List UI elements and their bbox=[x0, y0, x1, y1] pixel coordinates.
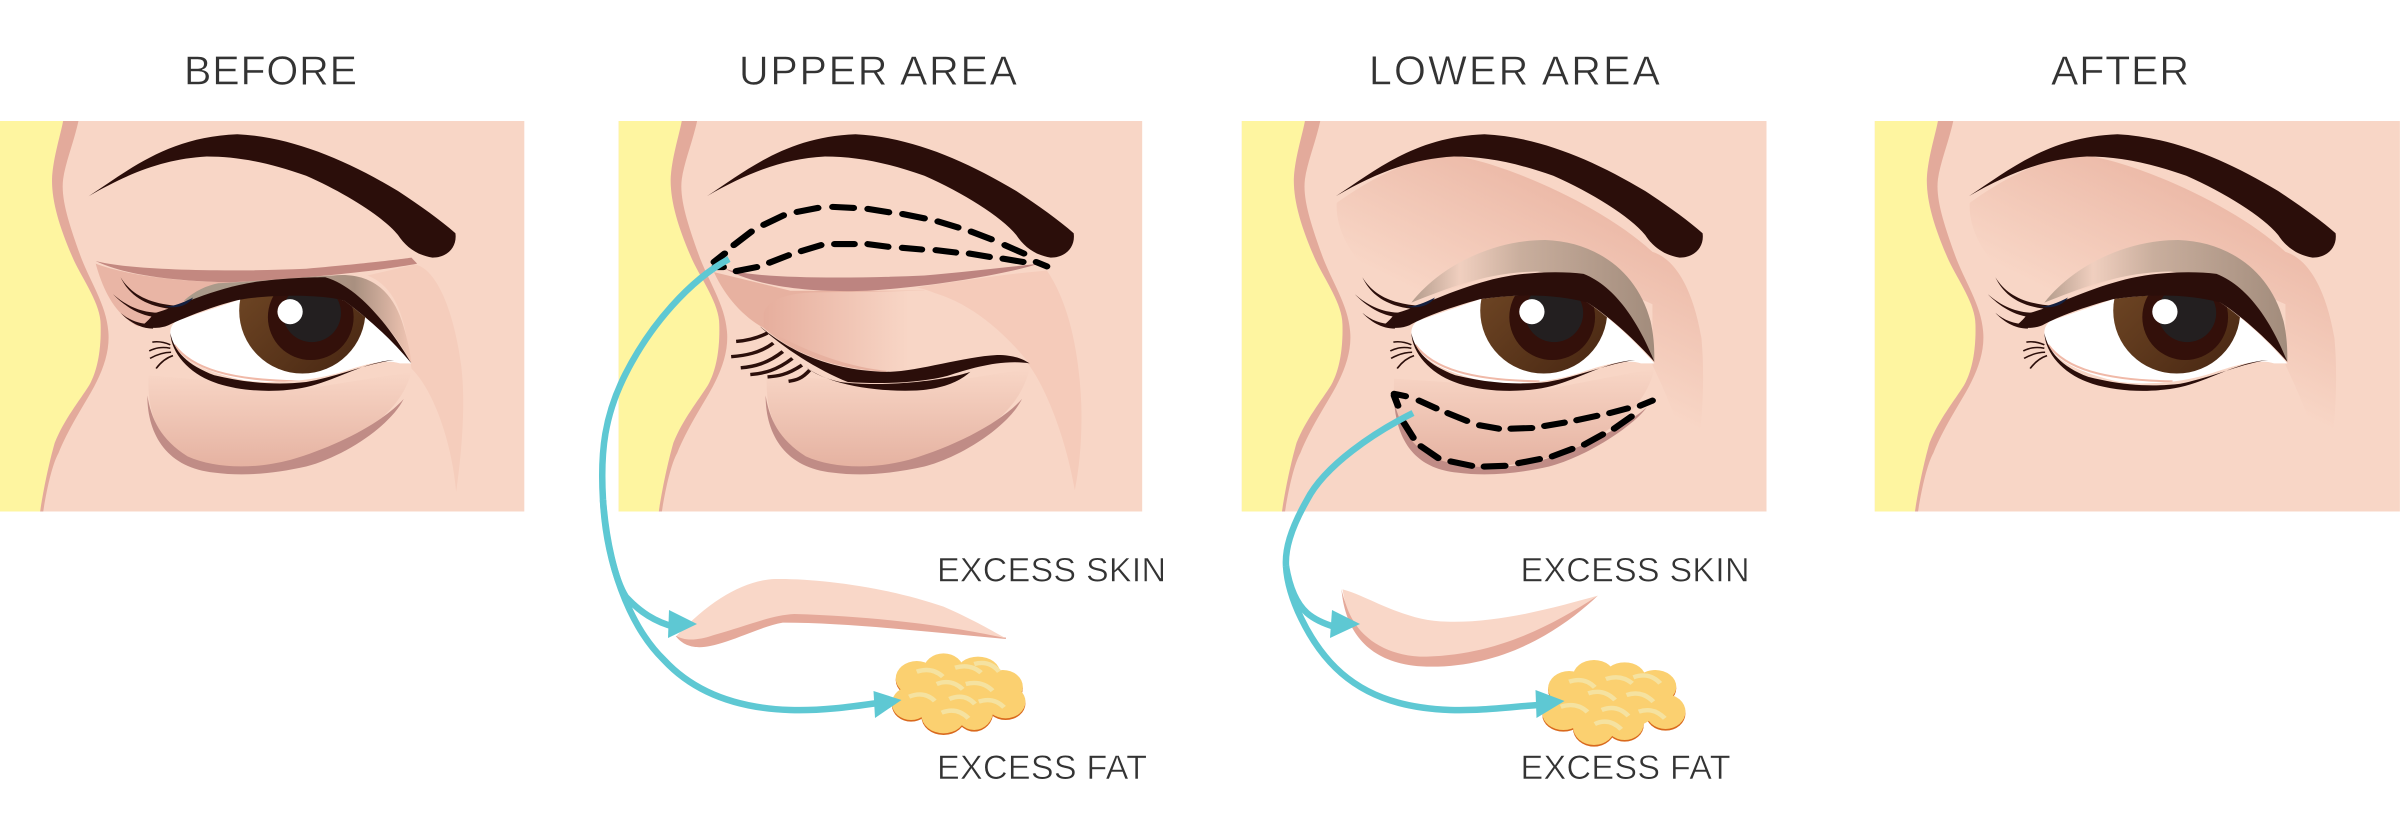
arrows: upper area bbox=[602, 259, 902, 718]
excess skin piece: upper bbox=[676, 579, 1006, 647]
label: excess skin lower: EXCESS SKIN bbox=[1520, 552, 1750, 590]
excess skin piece: lower bbox=[1341, 589, 1598, 667]
excess fat blob: lower bbox=[1542, 660, 1685, 747]
title: after: AFTER bbox=[2051, 48, 2189, 94]
panel: lower area eye bbox=[1242, 121, 1766, 511]
label: excess fat upper: EXCESS FAT bbox=[937, 749, 1147, 787]
excess fat blob: upper bbox=[892, 653, 1025, 735]
label: excess fat lower: EXCESS FAT bbox=[1520, 749, 1730, 787]
panel: upper area eye bbox=[619, 121, 1142, 511]
title: upper area: UPPER AREA bbox=[739, 48, 1018, 94]
label: excess skin upper: EXCESS SKIN bbox=[937, 552, 1166, 590]
incision dashes: upper lid bbox=[714, 207, 1047, 271]
arrows: lower area bbox=[1286, 413, 1564, 718]
panel: after eye bbox=[1875, 121, 2400, 511]
panel: before eye bbox=[0, 121, 524, 511]
title: lower area: LOWER AREA bbox=[1369, 48, 1661, 94]
incision dashes: lower lid bbox=[1394, 394, 1652, 467]
title: before: BEFORE bbox=[184, 48, 357, 94]
